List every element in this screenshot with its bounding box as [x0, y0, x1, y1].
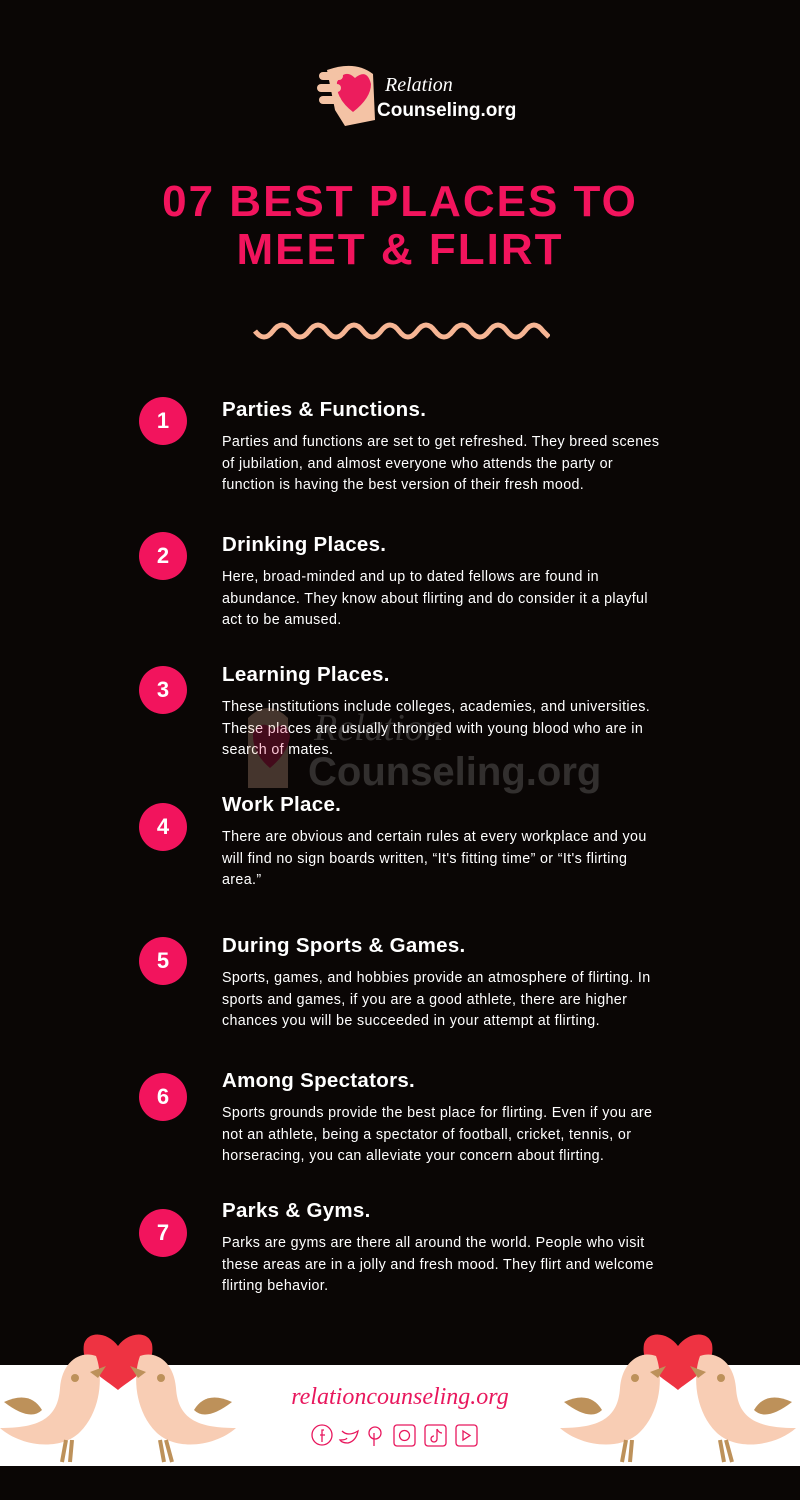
- item 5: Sports, games, and hobbies provide an atmosphere of flirting. In sports and games, if you are a good athlete, there are higher chances you will be succeeded in your attempt at flirting.: [222, 970, 651, 1029]
- item 5: [222, 934, 651, 1029]
- title: MEET & FLIRT: [236, 225, 564, 274]
- item 4: There are obvious and certain rules at every workplace and you will find no sign boards written, “It's fitting time” or “It's flirting area.”: [222, 829, 647, 888]
- logo: Counseling.org: [377, 100, 516, 121]
- item 7: Parks & Gyms.: [222, 1199, 371, 1222]
- number 6: [139, 1073, 187, 1121]
- number 1: [139, 397, 187, 445]
- number 1: 1: [157, 408, 169, 433]
- item 7: [222, 1199, 654, 1294]
- title: 07 BEST PLACES TO: [162, 177, 638, 226]
- item 3: Learning Places.: [222, 663, 390, 686]
- watermark: Relation: [314, 707, 443, 749]
- number 7: 7: [157, 1220, 169, 1245]
- website url: relationcounseling.org: [291, 1384, 509, 1410]
- number 5: 5: [157, 948, 169, 973]
- item 7: Parks are gyms are there all around the world. People who visit these areas are in a jolly and fresh mood. They flirt and welcome flirting behavior.: [222, 1235, 654, 1294]
- number 2: 2: [157, 543, 169, 568]
- birds left: [0, 1334, 236, 1462]
- item 4: Work Place.: [222, 793, 341, 816]
- number 6: 6: [157, 1084, 169, 1109]
- watermark: [248, 707, 601, 794]
- birds right: [560, 1334, 796, 1462]
- number 5: [139, 937, 187, 985]
- item 4: [222, 793, 647, 888]
- item 1: Parties & Functions.: [222, 398, 426, 421]
- item 1: [222, 398, 659, 493]
- logo: [317, 66, 516, 126]
- item 6: [222, 1069, 652, 1164]
- number 4: [139, 803, 187, 851]
- item 5: During Sports & Games.: [222, 934, 466, 957]
- wave decoration: [253, 322, 550, 340]
- number 3: 3: [157, 677, 169, 702]
- number 4: 4: [157, 814, 169, 839]
- watermark: Counseling.org: [308, 750, 601, 794]
- number 3: [139, 666, 187, 714]
- item 3: [222, 663, 650, 758]
- social icons: [311, 1424, 478, 1447]
- footer band: [0, 1365, 800, 1466]
- item 6: Among Spectators.: [222, 1069, 415, 1092]
- title: [162, 177, 638, 274]
- item 3: These institutions include colleges, academies, and universities. These places are usually thronged with young blood who are in search of mates.: [222, 699, 650, 758]
- logo: Relation: [385, 74, 453, 96]
- item 2: [222, 533, 648, 628]
- number 7: [139, 1209, 187, 1257]
- item 6: Sports grounds provide the best place for flirting. Even if you are not an athlete, being a spectator of football, cricket, tennis, or horseracing, you can alleviate your concern about flirting.: [222, 1105, 652, 1164]
- item 1: Parties and functions are set to get refreshed. They breed scenes of jubilation, and almost everyone who attends the party or function is having the best version of their fresh mood.: [222, 434, 659, 493]
- number 2: [139, 532, 187, 580]
- item 2: Drinking Places.: [222, 533, 386, 556]
- item 2: Here, broad-minded and up to dated fellows are found in abundance. They know about flirting and do consider it a playful act to be amused.: [222, 569, 648, 628]
